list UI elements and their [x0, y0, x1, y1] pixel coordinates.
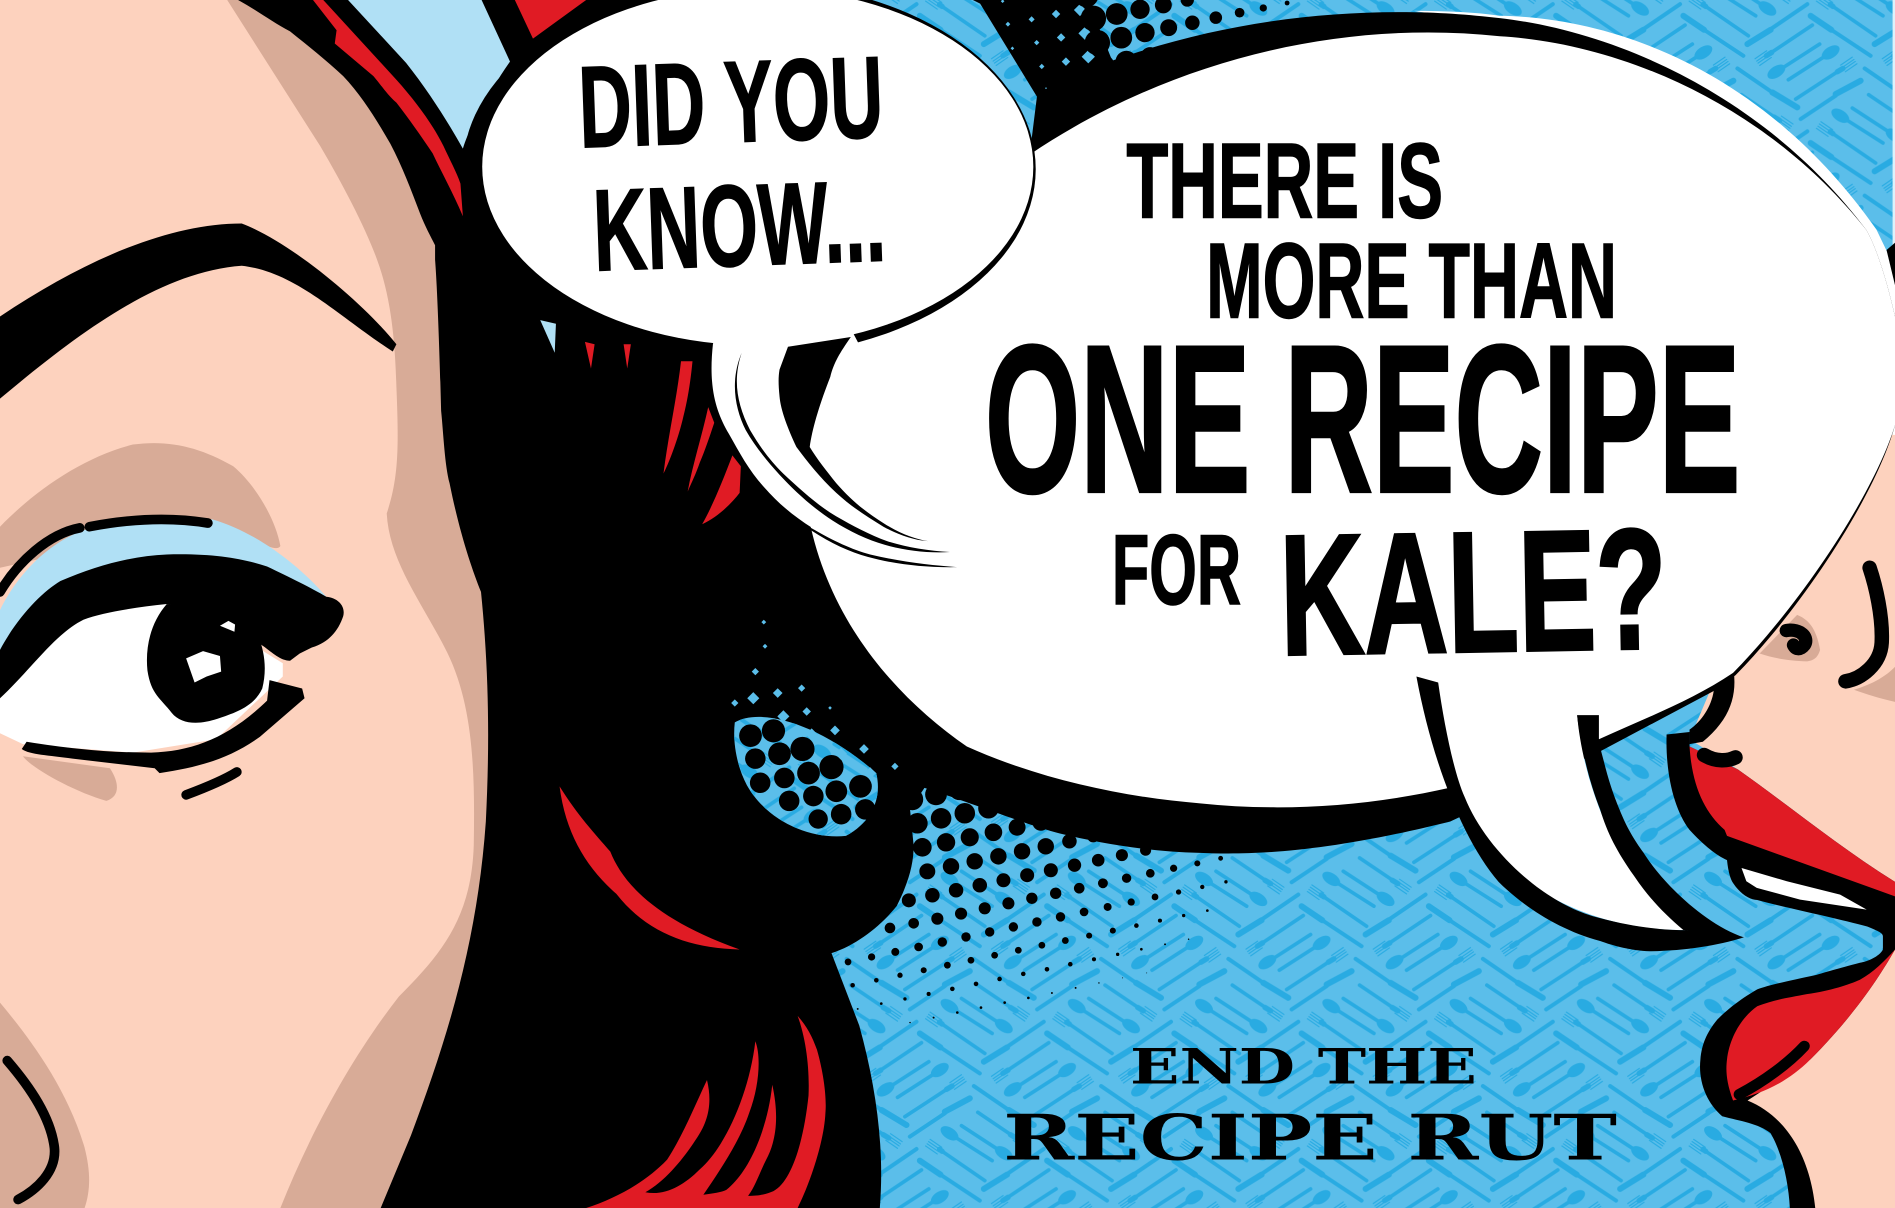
- small balloon tail: [712, 331, 957, 567]
- lower lip black stroke: [1739, 1046, 1804, 1094]
- black wedge with diamonds between the balloons: [973, 0, 1113, 155]
- hair highlight: top red tip: [515, 0, 586, 39]
- lower lash shadow: [23, 756, 117, 801]
- right face: [1666, 362, 1895, 1208]
- upper skin: [1690, 362, 1895, 882]
- eye shadow above: [0, 443, 280, 568]
- text: END THE RECIPE RUT: RECIPE RUT: [1003, 1101, 1617, 1175]
- hair highlight: small slivers: [540, 320, 741, 524]
- small speech balloon: black outline: [463, 0, 1036, 356]
- lower skin: [1740, 942, 1895, 1208]
- text: main balloon message: THERE IS: [1126, 121, 1443, 240]
- lower lid line: [22, 680, 305, 773]
- text: DID YOU KNOW...: DID YOU: [576, 32, 885, 172]
- big speech balloon: outer white rim: [1414, 11, 1895, 435]
- text: main balloon message: KALE?: [1278, 494, 1668, 692]
- teeth: [1742, 868, 1867, 910]
- big speech balloon: black outline and shadow: [773, 12, 1895, 853]
- face shadow along the hair: [227, 0, 508, 1208]
- text: main balloon message: FOR: [1112, 514, 1241, 625]
- text: main balloon message: MORE THAN: [1206, 222, 1617, 341]
- text: END THE RECIPE RUT: [1003, 1040, 1617, 1175]
- lower lip red: [1726, 949, 1895, 1100]
- big balloon tail: right outline: [1577, 715, 1744, 937]
- philtrum stroke: [1690, 667, 1734, 744]
- eye white: [0, 592, 283, 753]
- upper lip red: [1690, 747, 1895, 896]
- blue eyeshadow: [0, 518, 326, 664]
- big speech balloon: corner black sliver: [1887, 243, 1895, 285]
- woman's black hair, left: [238, 0, 967, 1208]
- text: main balloon message: [985, 121, 1740, 692]
- left eyebrow: [0, 223, 396, 399]
- big speech balloon: white body: [808, 32, 1895, 930]
- small speech balloon: white body: [482, 0, 1033, 345]
- text: DID YOU KNOW...: [576, 32, 888, 296]
- iris highlight large: [186, 651, 221, 683]
- cheek line: [1845, 568, 1882, 681]
- halftone dots: top sky: [1074, 0, 1290, 79]
- iris: [147, 604, 265, 723]
- hair highlight: curl red: [560, 786, 740, 949]
- text: DID YOU KNOW...: KNOW...: [591, 155, 888, 296]
- left face skin: [0, 0, 489, 1208]
- text: END THE RECIPE RUT: END THE: [1130, 1040, 1477, 1096]
- iris highlight small: [220, 621, 235, 632]
- left eye: [0, 443, 344, 801]
- left nose: [0, 1003, 89, 1208]
- small line under eye: [186, 772, 237, 795]
- halftone dots: lower sky: [845, 778, 1228, 1023]
- nose shadow: [1760, 615, 1820, 661]
- upper lash strokes: [0, 519, 208, 592]
- thick upper lid: [0, 554, 344, 698]
- hair highlight: top red strip: [313, 0, 463, 216]
- nostril mark: [1786, 630, 1806, 649]
- lip top stroke: [1704, 755, 1735, 760]
- mouth and chin black outline: [1666, 732, 1895, 1208]
- hair highlight: bottom red strands: [586, 1016, 826, 1208]
- hair highlight: light blue: [348, 0, 510, 149]
- earring: blue blob with halftone: [731, 620, 899, 836]
- cheek shadow: [1854, 667, 1895, 702]
- big balloon tail: left outline: [1416, 676, 1744, 951]
